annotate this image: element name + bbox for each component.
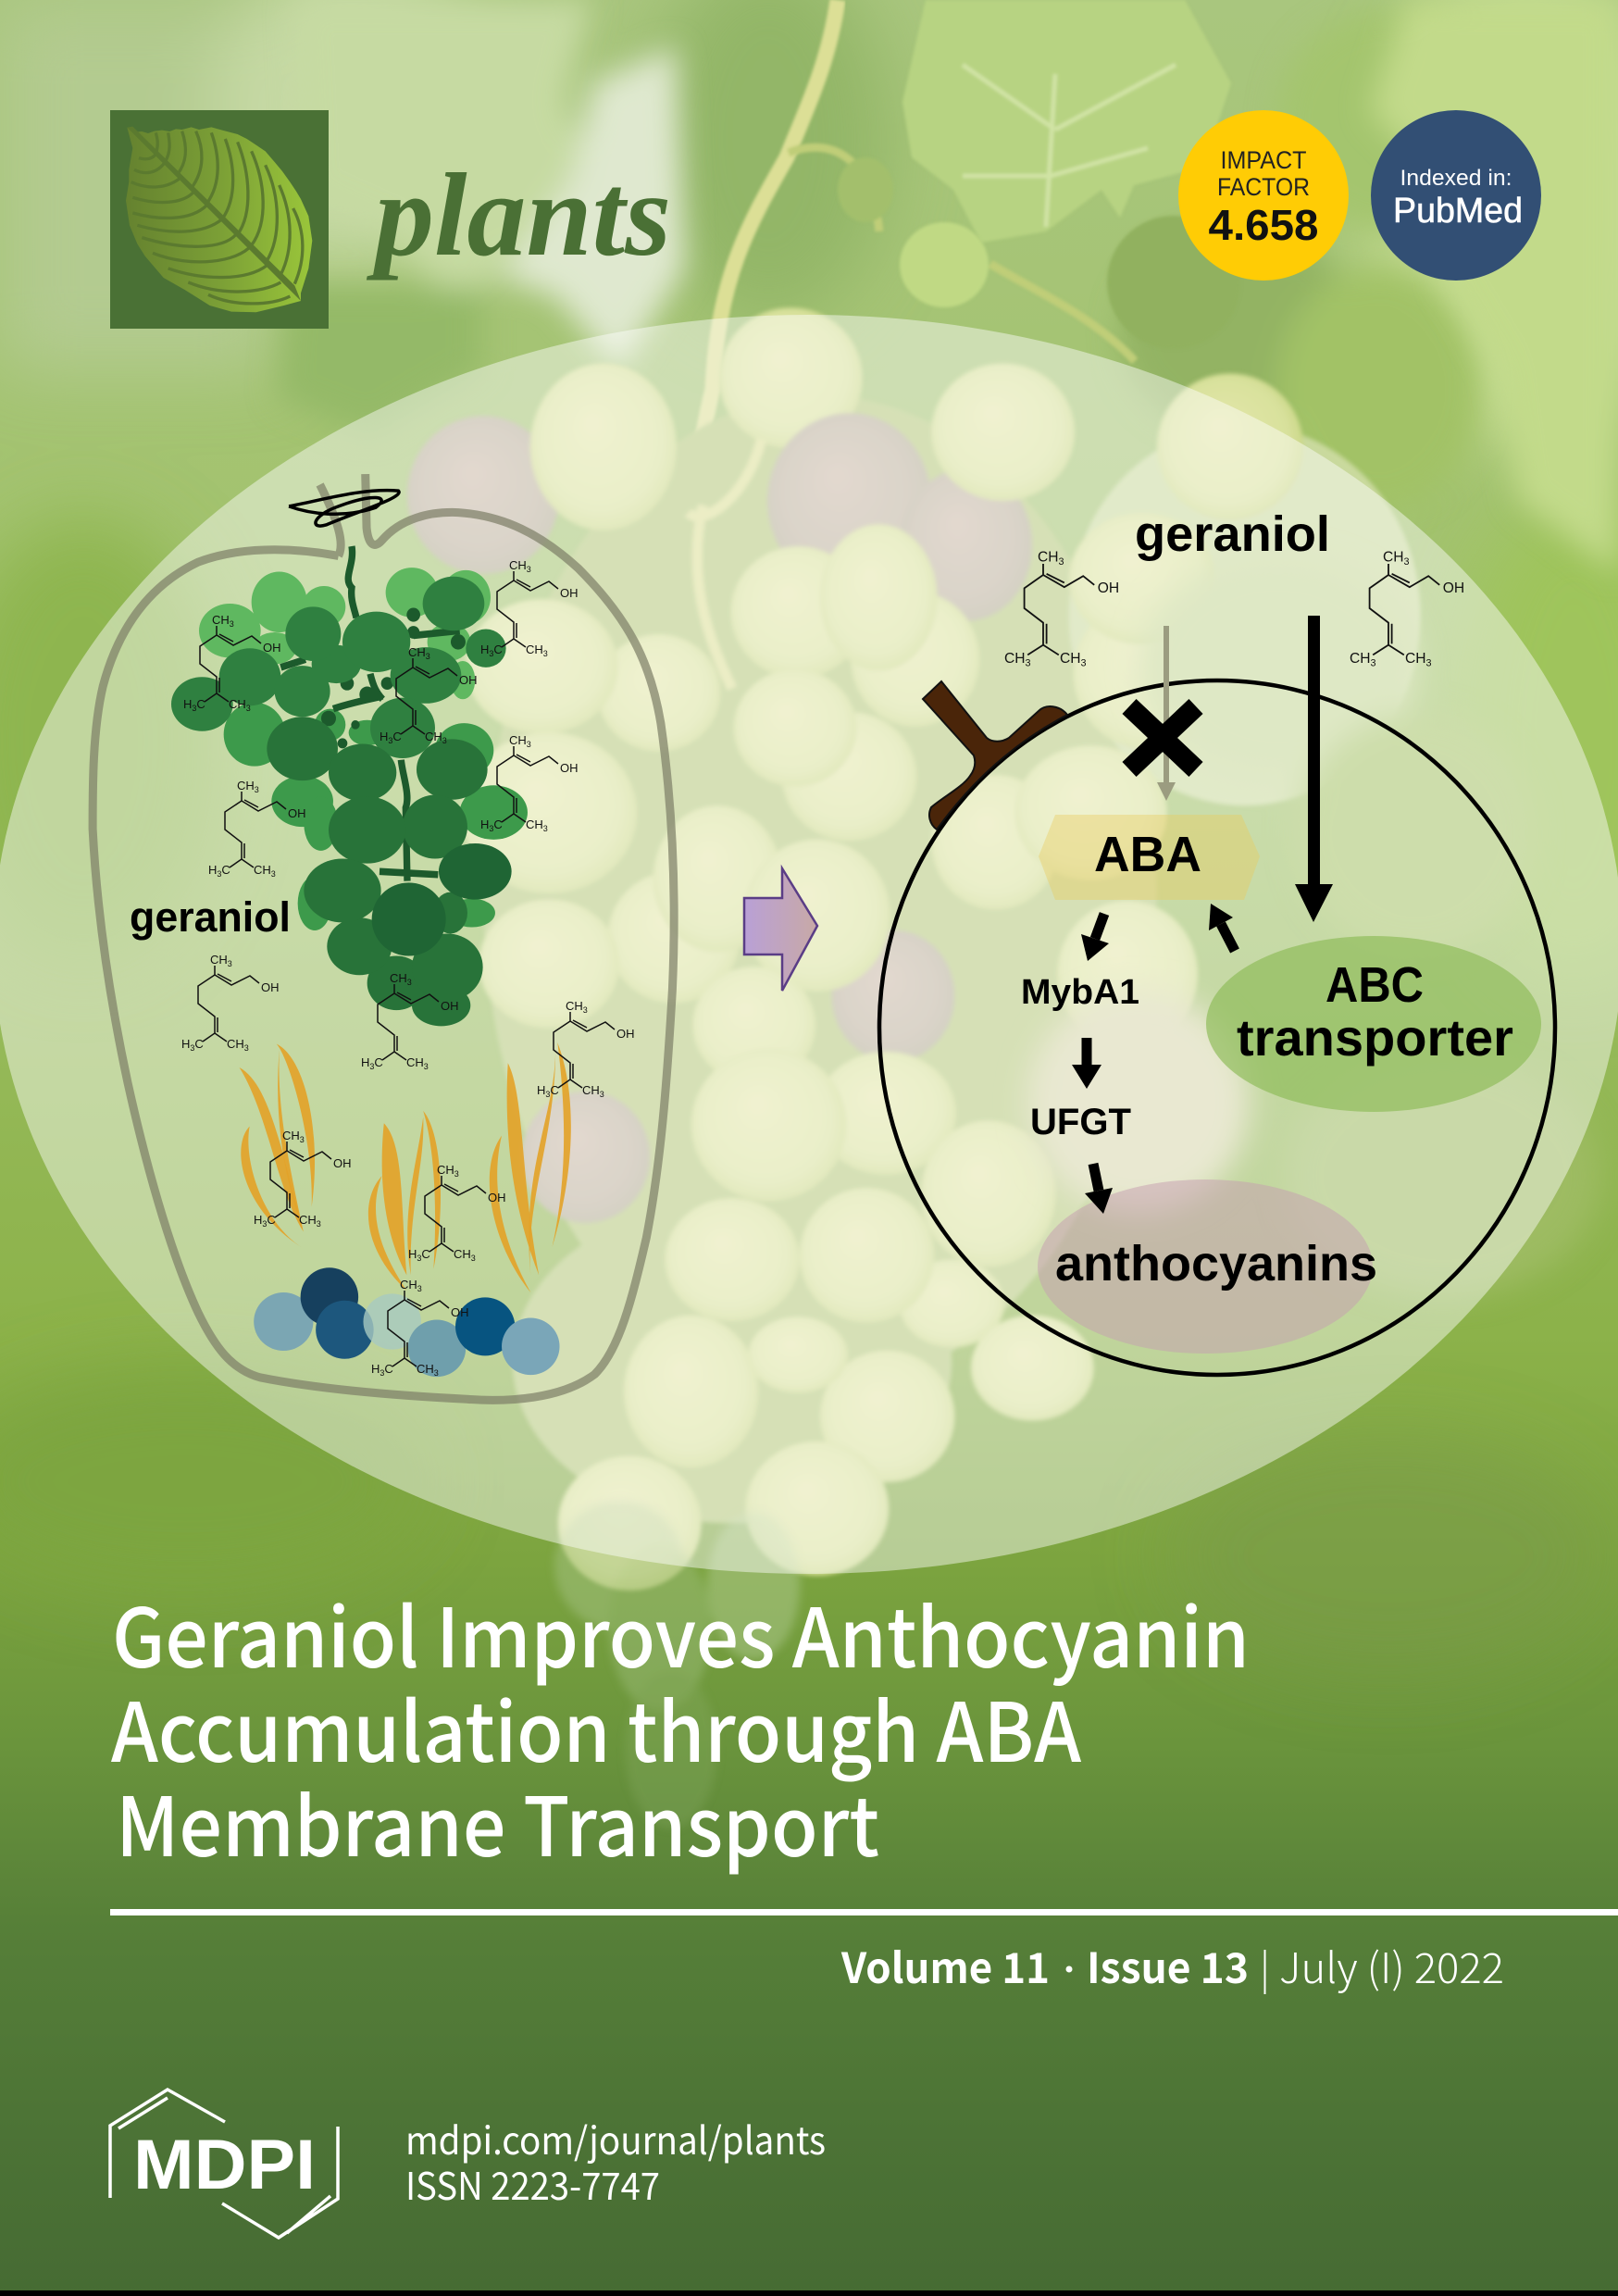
geraniol molecule 8: H [537, 1083, 545, 1097]
arrow: long black arrow [1295, 616, 1333, 922]
geraniol molecule 11: CH [417, 1362, 434, 1376]
geraniol molecule 7: CH [406, 1055, 424, 1069]
geraniol molecule left of arrow: CH [1060, 651, 1081, 667]
geraniol molecule 3 [380, 645, 478, 745]
geraniol molecule left of arrow: 3 [1026, 657, 1031, 668]
icon: leaf [126, 127, 312, 312]
article title: Accumulation through ABA [111, 1668, 1081, 1786]
badge: impact factor: 4.658 [1209, 201, 1318, 249]
geraniol molecule 7: 3 [369, 1062, 374, 1071]
orange leaves [240, 1042, 571, 1292]
photo: lower pale grapes fading out [554, 1501, 800, 1828]
geraniol molecule 4: CH [526, 817, 543, 831]
geraniol molecule left of arrow: 3 [1059, 556, 1064, 568]
geraniol molecule 6: C [194, 1037, 204, 1051]
ABC transporter oval [1206, 936, 1541, 1112]
arrow: UFGT to anthocyanins [1085, 1164, 1113, 1214]
journal url and issn: mdpi.com/journal/plants [405, 2110, 826, 2165]
geraniol molecule 7: C [374, 1055, 383, 1069]
geraniol molecule 2: 3 [543, 649, 548, 658]
issue information: July (I) 2022 [1279, 1935, 1504, 1995]
arrow: ABC transporter to ABA [1209, 904, 1235, 951]
geraniol molecule 3: C [392, 730, 402, 743]
geraniol molecule 2: 3 [527, 565, 531, 574]
badge: impact factor [1178, 110, 1349, 281]
geraniol molecule 2: OH [560, 586, 578, 600]
geraniol molecule 3: OH [459, 673, 478, 687]
geraniol molecule 1: 3 [246, 704, 251, 713]
UFGT label: UFGT [1030, 1102, 1131, 1142]
geraniol molecule 10: H [408, 1247, 417, 1261]
geraniol molecule 1: 3 [230, 619, 234, 629]
geraniol molecule 9: 3 [262, 1219, 267, 1229]
squiggle pedicel [289, 491, 399, 526]
bottom black strip [0, 2290, 1618, 2296]
geraniol molecule 10: 3 [417, 1254, 421, 1263]
geraniol molecule 6: 3 [190, 1043, 194, 1053]
geraniol molecule 5: 3 [217, 869, 221, 879]
geraniol molecule 9 [254, 1129, 352, 1229]
geraniol molecule 7: OH [441, 999, 459, 1013]
geraniol molecule right of arrow: CH [1383, 550, 1404, 566]
ABC transporter label: transporter [1237, 1008, 1513, 1067]
geraniol molecule 5: CH [254, 863, 271, 877]
geraniol molecule 4: 3 [543, 824, 548, 833]
geraniol molecule 3: 3 [388, 736, 392, 745]
geraniol molecule right of arrow: CH [1405, 651, 1426, 667]
geraniol molecule 9: CH [282, 1129, 300, 1142]
geraniol molecule 10 [408, 1163, 505, 1263]
geraniol molecule 5: H [208, 863, 217, 877]
geraniol molecule 6: H [181, 1037, 190, 1051]
geraniol molecule 9: 3 [300, 1135, 305, 1144]
geraniol molecule 7: CH [390, 971, 407, 985]
geraniol molecule 3: 3 [426, 652, 430, 661]
geraniol molecule 8: C [550, 1083, 559, 1097]
geraniol molecule 2: H [480, 643, 489, 656]
icon: brown stem [923, 681, 1067, 830]
geraniol molecule 8: CH [582, 1083, 600, 1097]
geraniol molecule 2: CH [509, 558, 527, 572]
geraniol molecule 4: 3 [527, 740, 531, 749]
arrow: blocked gray arrow [1157, 626, 1176, 801]
geraniol molecule left of arrow: CH [1038, 550, 1059, 566]
photo: upper grapes [789, 147, 1240, 361]
geraniol molecule 3: CH [425, 730, 442, 743]
geraniol molecule 7 [361, 971, 459, 1071]
geraniol molecule 10: CH [437, 1163, 454, 1177]
geraniol molecule 4: OH [560, 761, 578, 775]
badge: impact factor: FACTOR [1217, 173, 1310, 201]
badge: impact factor: IMPACT [1220, 146, 1307, 174]
geraniol molecule 3: 3 [442, 736, 447, 745]
geraniol label right: geraniol [1135, 506, 1330, 562]
geraniol molecule right of arrow: 3 [1371, 657, 1376, 668]
journal logo [110, 110, 329, 329]
badge: indexed in PubMed: Indexed in: [1400, 166, 1512, 191]
geraniol molecule 7: 3 [424, 1062, 429, 1071]
journal url and issn [405, 2110, 826, 2211]
ABC transporter label: ABC [1326, 957, 1424, 1013]
geraniol molecule 6 [181, 953, 280, 1053]
cell outline [879, 680, 1555, 1375]
geraniol molecule 8: CH [566, 999, 583, 1013]
photo: lower right leaves [1027, 555, 1601, 1296]
geraniol molecule 9: OH [333, 1156, 352, 1170]
geraniol molecule 7: 3 [407, 978, 412, 987]
geraniol molecule right of arrow: CH [1350, 651, 1371, 667]
geraniol molecule 9: 3 [317, 1219, 321, 1229]
geraniol molecule 2: CH [526, 643, 543, 656]
geraniol molecule 4: 3 [489, 824, 493, 833]
issue information [840, 1935, 1504, 1995]
geraniol molecule 4: CH [509, 733, 527, 747]
geraniol molecule 8: 3 [600, 1090, 604, 1099]
geraniol molecule 5: OH [288, 806, 305, 820]
photo: upper vine leaf [902, 0, 1231, 243]
geraniol molecule 8: 3 [583, 1005, 588, 1015]
geraniol molecule 1: CH [229, 697, 246, 711]
panel: cell pathway [879, 506, 1555, 1375]
translucent white oval overlay [0, 315, 1618, 1574]
divider rule [110, 1909, 1618, 1915]
geraniol molecule 11: 3 [434, 1368, 439, 1378]
geraniol molecule 10: 3 [471, 1254, 476, 1263]
geraniol molecule 11: 3 [417, 1284, 422, 1293]
geraniol molecule 11: CH [400, 1278, 417, 1292]
geraniol molecule left of arrow: 3 [1081, 657, 1087, 668]
anthocyanins oval [1038, 1179, 1373, 1354]
article title: Membrane Transport [116, 1763, 879, 1880]
geraniol molecule right of arrow [1350, 550, 1464, 668]
blue seeds [254, 1267, 560, 1377]
geraniol molecule right of arrow: 3 [1404, 556, 1410, 568]
geraniol molecule 1: H [183, 697, 192, 711]
MDPI logo [110, 2090, 338, 2238]
geraniol molecule 2: 3 [489, 649, 493, 658]
geraniol molecule 5: 3 [255, 785, 259, 794]
MDPI logo: MDPI [133, 2126, 316, 2204]
geraniol molecule 8 [537, 999, 635, 1099]
geraniol molecule 4: H [480, 817, 489, 831]
arrow: ABA to MybA1 [1081, 914, 1109, 961]
geraniol molecule 9: H [254, 1213, 262, 1227]
photo: grape bunch [407, 307, 1421, 1591]
grape berry outline [93, 474, 674, 1400]
geraniol molecule 3: H [380, 730, 388, 743]
geraniol molecule 4 [480, 733, 578, 833]
geraniol molecule 6: CH [210, 953, 228, 967]
geraniol molecule 10: CH [454, 1247, 471, 1261]
MybA1 label: MybA1 [1021, 973, 1139, 1012]
geraniol molecule right of arrow: 3 [1426, 657, 1432, 668]
geraniol molecule 2 [480, 558, 578, 658]
article title [111, 1574, 1250, 1880]
geraniol molecule 5: C [221, 863, 230, 877]
geraniol molecule 11: OH [451, 1305, 468, 1319]
geraniol molecule 8: OH [616, 1027, 635, 1041]
arrow: MybA1 to UFGT [1072, 1038, 1101, 1089]
panel: grape berry with geraniol [93, 474, 674, 1400]
arrow: purple block arrow [744, 868, 817, 991]
geraniol molecule 5 [208, 779, 305, 879]
geraniol molecule 10: C [421, 1247, 430, 1261]
geraniol molecule 11: 3 [380, 1368, 384, 1378]
geraniol molecule 8: 3 [545, 1090, 550, 1099]
geraniol molecule 11 [371, 1278, 468, 1378]
geraniol molecule right of arrow: OH [1443, 580, 1464, 596]
geraniol molecule 1: OH [263, 641, 281, 655]
geraniol molecule 6: 3 [228, 959, 232, 968]
geraniol molecule 10: 3 [454, 1169, 459, 1179]
geraniol molecule left of arrow: CH [1004, 651, 1026, 667]
geraniol molecule left of arrow: OH [1098, 580, 1119, 596]
issue information: Issue 13 [1087, 1935, 1249, 1995]
geraniol molecule 1 [183, 613, 281, 713]
geraniol molecule 6: CH [227, 1037, 244, 1051]
geraniol molecule 7: H [361, 1055, 369, 1069]
geraniol molecule 6: OH [261, 980, 280, 994]
article title: Geraniol Improves Anthocyanin [112, 1574, 1250, 1691]
badge: indexed in PubMed: PubMed [1393, 192, 1523, 231]
issue information: Volume 11 [840, 1935, 1050, 1995]
geraniol molecule 4: C [493, 817, 503, 831]
geraniol molecule 5: CH [237, 779, 255, 792]
icon: black cross [1129, 706, 1196, 769]
geraniol molecule 11: H [371, 1362, 380, 1376]
ABA label: ABA [1094, 827, 1201, 882]
ABC transporter label [1237, 957, 1513, 1067]
photo: grape stem [680, 0, 838, 833]
journal name: plants [366, 149, 671, 281]
geraniol molecule 1: 3 [192, 704, 196, 713]
anthocyanins label: anthocyanins [1055, 1236, 1377, 1292]
ABA hexagon [1039, 815, 1260, 900]
geraniol molecule 5: 3 [271, 869, 276, 879]
geraniol label left: geraniol [130, 893, 291, 941]
geraniol molecule 1: CH [212, 613, 230, 627]
geraniol molecule 9: C [267, 1213, 276, 1227]
geraniol molecule 3: CH [408, 645, 426, 659]
journal url and issn: ISSN 2223-7747 [405, 2155, 660, 2211]
geraniol molecule left of arrow [1004, 550, 1119, 668]
geraniol molecule 1: C [196, 697, 205, 711]
photo: right vine leaf [1370, 0, 1618, 574]
grape cluster [171, 546, 528, 1026]
geraniol molecule 6: 3 [244, 1043, 249, 1053]
geraniol molecule 2: C [493, 643, 503, 656]
geraniol molecule 9: CH [299, 1213, 317, 1227]
badge: indexed in PubMed [1371, 110, 1541, 281]
geraniol molecule 11: C [384, 1362, 393, 1376]
geraniol molecule 10: OH [488, 1191, 505, 1204]
